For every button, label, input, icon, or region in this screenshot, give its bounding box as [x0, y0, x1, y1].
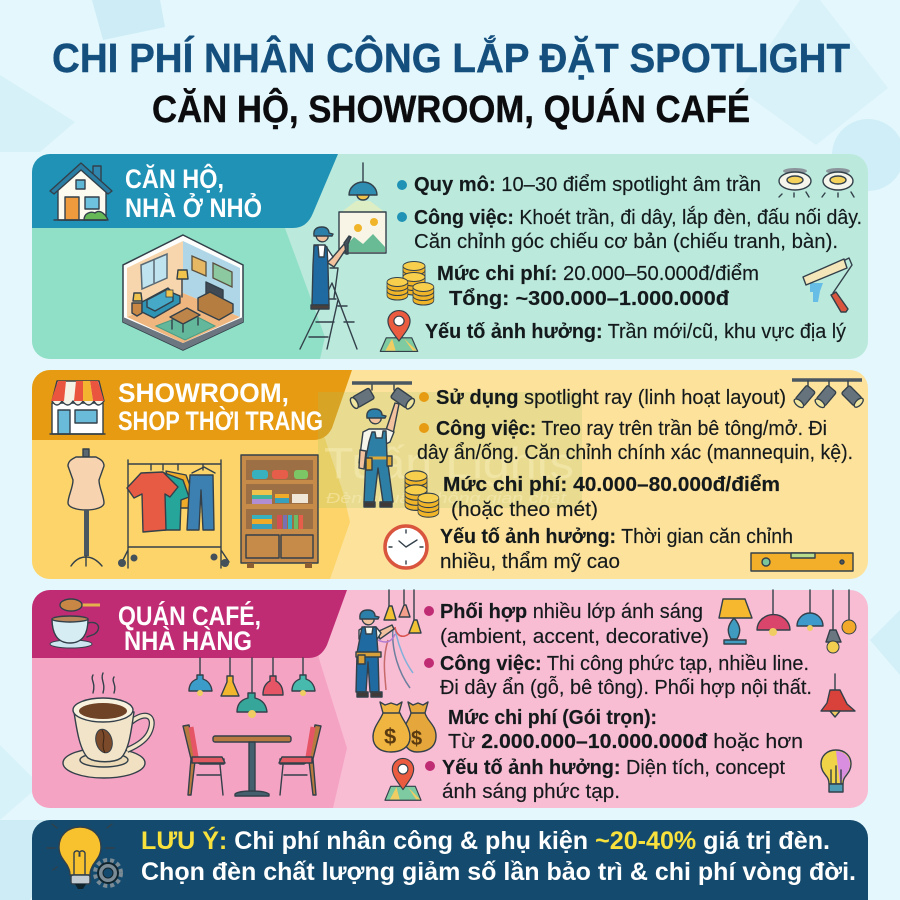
list: showroom details: (hoặc theo mét) [451, 499, 598, 521]
list: showroom details: Sử dụng spotlight ray (linh hoạt layout) [436, 387, 786, 409]
icon: coffee cup [63, 673, 152, 778]
icon: spirit level [751, 553, 853, 571]
panel: quán café, nhà hàng [32, 590, 868, 808]
illustration: isometric living room [123, 235, 243, 350]
panel background: căn hộ [32, 154, 868, 359]
heading: showroom: SHOP THỜI TRANG [118, 406, 323, 436]
title [52, 35, 850, 131]
list: quán café details: Công việc: Thi công phức tạp, nhiều line. [440, 653, 809, 675]
icon: map pin café [385, 758, 421, 800]
list: quán café details: Đi dây ẩn (gỗ, bê tông). Phối hợp nội thất. [440, 676, 812, 699]
icon: bulb with gear [47, 824, 121, 889]
text: note [141, 825, 856, 886]
list: căn hộ details: Tổng: ~300.000–1.000.000đ [449, 288, 730, 310]
icon: ceiling lamp [340, 163, 386, 213]
list: quán café details: ánh sáng phức tạp. [442, 781, 620, 803]
ladder [300, 268, 357, 349]
footer background [32, 820, 868, 900]
worker body [325, 243, 348, 267]
icon: coin stacks [387, 262, 434, 305]
heading: căn hộ [125, 164, 262, 223]
heading: quán café [118, 601, 261, 656]
icon: wall clock [385, 526, 427, 568]
list: quán café details: (ambient, accent, decorative) [440, 626, 709, 648]
icon: money bags: $ [411, 728, 422, 750]
icon: bookshelf [241, 455, 318, 568]
heading: quán café: QUÁN CAFÉ, [118, 601, 261, 631]
title: CHI PHÍ NHÂN CÔNG LẮP ĐẶT SPOTLIGHT [52, 35, 850, 81]
illustration: worker on ladder hanging picture [300, 163, 386, 349]
panel background: quán café [32, 590, 868, 808]
icon: map pin [380, 311, 418, 351]
icon: track spotlights [792, 380, 865, 409]
list: căn hộ details: Căn chỉnh góc chiếu cơ bản (chiếu tranh, bàn). [414, 231, 838, 253]
list: quán café details [424, 601, 812, 803]
heading: căn hộ: CĂN HỘ, [125, 164, 224, 194]
text: note: Chọn đèn chất lượng giảm số lần bảo trì & chi phí vòng đời. [141, 858, 856, 886]
watermark [318, 392, 582, 508]
heading: quán café: NHÀ HÀNG [124, 626, 252, 656]
icon: coin stacks showroom [405, 471, 439, 517]
panel background: showroom [32, 370, 868, 579]
illustration: worker adjusting track light [349, 383, 416, 507]
list: showroom details [417, 387, 853, 573]
list: showroom details: Mức chi phí: 40.000–80.000đ/điểm [443, 474, 780, 496]
icon: clothes rack [118, 460, 229, 568]
illustration: table and chairs [183, 725, 321, 796]
icon: recessed spotlights [779, 168, 854, 197]
heading: căn hộ: NHÀ Ở NHỎ [125, 193, 262, 223]
heading: showroom [118, 378, 323, 436]
icon: mannequin [68, 449, 104, 566]
list: quán café details: Phối hợp nhiều lớp ánh sáng [440, 601, 703, 623]
list: căn hộ details [397, 174, 862, 343]
illustration: electrician with wires [356, 590, 421, 697]
title: CĂN HỘ, SHOWROOM, QUÁN CAFÉ [152, 86, 750, 131]
list: showroom details: dây ẩn/ống. Căn chỉnh chính xác (mannequin, kệ). [417, 442, 853, 464]
icon: paint roller [803, 258, 852, 312]
list: căn hộ details: Quy mô: 10–30 điểm spotlight âm trần [414, 174, 761, 196]
list: căn hộ details: Yếu tố ảnh hưởng: Trần mới/cũ, khu vực địa lý [425, 321, 846, 343]
list: showroom details: Công việc: Treo ray trên trần bê tông/mở. Đi [436, 418, 827, 440]
icon: money bags [373, 702, 436, 752]
panel: căn hộ, nhà ở nhỏ [32, 154, 868, 359]
list: căn hộ details: Mức chi phí: 20.000–50.000đ/điểm [437, 263, 759, 285]
list: showroom details: nhiều, thẩm mỹ cao [440, 551, 620, 573]
icon: money bags: $ [384, 724, 396, 749]
panel: showroom, shop thời trang [32, 370, 868, 579]
panel: lưu ý footer [32, 820, 868, 900]
icon: house [50, 163, 112, 220]
icon: tea cup and honey dipper [50, 599, 100, 648]
icon: storefront [50, 381, 105, 434]
text: note: LƯU Ý: Chi phí nhân công & phụ kiện ~20-40% giá trị đèn. [141, 825, 830, 855]
list: quán café details: Yếu tố ảnh hưởng: Diện tích, concept [442, 757, 785, 779]
illustration: pendant lamps [189, 658, 315, 718]
list: quán café details: Từ 2.000.000–10.000.000đ hoặc hơn [448, 731, 803, 753]
list: showroom details: Yếu tố ảnh hưởng: Thời gian căn chỉnh [440, 526, 793, 548]
heading: showroom: SHOWROOM, [118, 378, 289, 408]
list: quán café details: Mức chi phí (Gói trọn): [448, 707, 657, 729]
watermark: Tuấn Lights [324, 439, 574, 488]
icon: colourful light bulb [821, 750, 851, 792]
icon: red pendant lamp [821, 674, 855, 717]
icon: table lamp and pendants [719, 590, 856, 653]
list: căn hộ details: Công việc: Khoét trần, đi dây, lắp đèn, đấu nối dây. [414, 206, 862, 229]
watermark: Đèn chuẩn không gian chất [326, 490, 567, 507]
